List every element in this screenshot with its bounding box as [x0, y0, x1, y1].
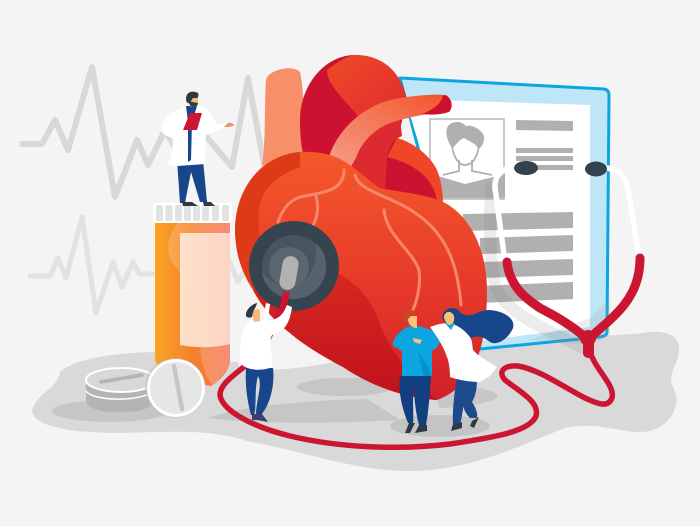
- main body: [235, 152, 487, 400]
- head: [407, 316, 417, 328]
- right chamber: [385, 138, 443, 204]
- label: [180, 233, 230, 347]
- translucent floor shadow: [530, 298, 610, 345]
- clipboard: [400, 78, 610, 350]
- hair: [446, 122, 484, 150]
- tablet: round: [145, 358, 205, 418]
- doctor on bottle: [161, 92, 235, 206]
- legs: [177, 160, 207, 203]
- ECG line: small: [30, 217, 160, 313]
- white ear tubes: [495, 167, 639, 262]
- red binaurals: [507, 258, 640, 340]
- tablet: flat stack: [86, 368, 156, 412]
- hair: [246, 303, 257, 318]
- neckline: [443, 160, 492, 175]
- shoes: [252, 414, 268, 422]
- shirt: [438, 174, 505, 198]
- vessel: pale vena cava: [262, 68, 308, 170]
- ear tip right: [585, 162, 607, 176]
- hair: [443, 308, 513, 343]
- ear tips: [514, 161, 538, 175]
- shoes: [451, 422, 462, 431]
- legs: [453, 376, 477, 424]
- shoe: [203, 202, 215, 206]
- heart: [235, 55, 487, 400]
- woman doctor: [430, 308, 513, 431]
- stethoscope: [220, 161, 640, 447]
- sweater: [393, 326, 440, 376]
- red tube: [220, 285, 612, 447]
- coat: [430, 323, 497, 382]
- face outline: [452, 142, 479, 165]
- hair: [186, 92, 198, 103]
- coronary vessels: [278, 170, 461, 310]
- legs: [399, 376, 431, 425]
- paper: [405, 99, 590, 341]
- legs: [246, 368, 273, 415]
- upper chamber: [300, 55, 407, 192]
- darker lower shade: [253, 273, 437, 400]
- coat: [240, 303, 292, 370]
- head: [252, 309, 260, 322]
- bottle cap: [153, 203, 232, 223]
- chest piece: [249, 221, 339, 318]
- arch inner: [345, 119, 402, 192]
- ECG line: large: [22, 67, 265, 197]
- coat: [161, 106, 230, 166]
- tube shadow: [490, 182, 590, 352]
- profile photo: [430, 119, 505, 199]
- pill bottle: [153, 203, 232, 386]
- face: [190, 96, 198, 107]
- hand: [224, 123, 235, 127]
- shoes: [405, 423, 415, 433]
- aortic arch: [328, 95, 451, 172]
- ground shadow: [32, 300, 679, 471]
- shoe: [415, 425, 427, 433]
- face: [444, 312, 454, 325]
- shoe: [470, 417, 479, 428]
- tablets: [86, 358, 205, 418]
- clipboard in hand: [183, 113, 202, 130]
- text lines: [463, 120, 573, 303]
- hair: [403, 310, 416, 324]
- person with stethoscope: [240, 303, 292, 422]
- ECG line: fragment behind heart: [228, 258, 246, 282]
- darker left band: [235, 152, 300, 292]
- beard: [189, 102, 198, 107]
- shoes: [182, 202, 198, 206]
- man in blue: [393, 310, 440, 433]
